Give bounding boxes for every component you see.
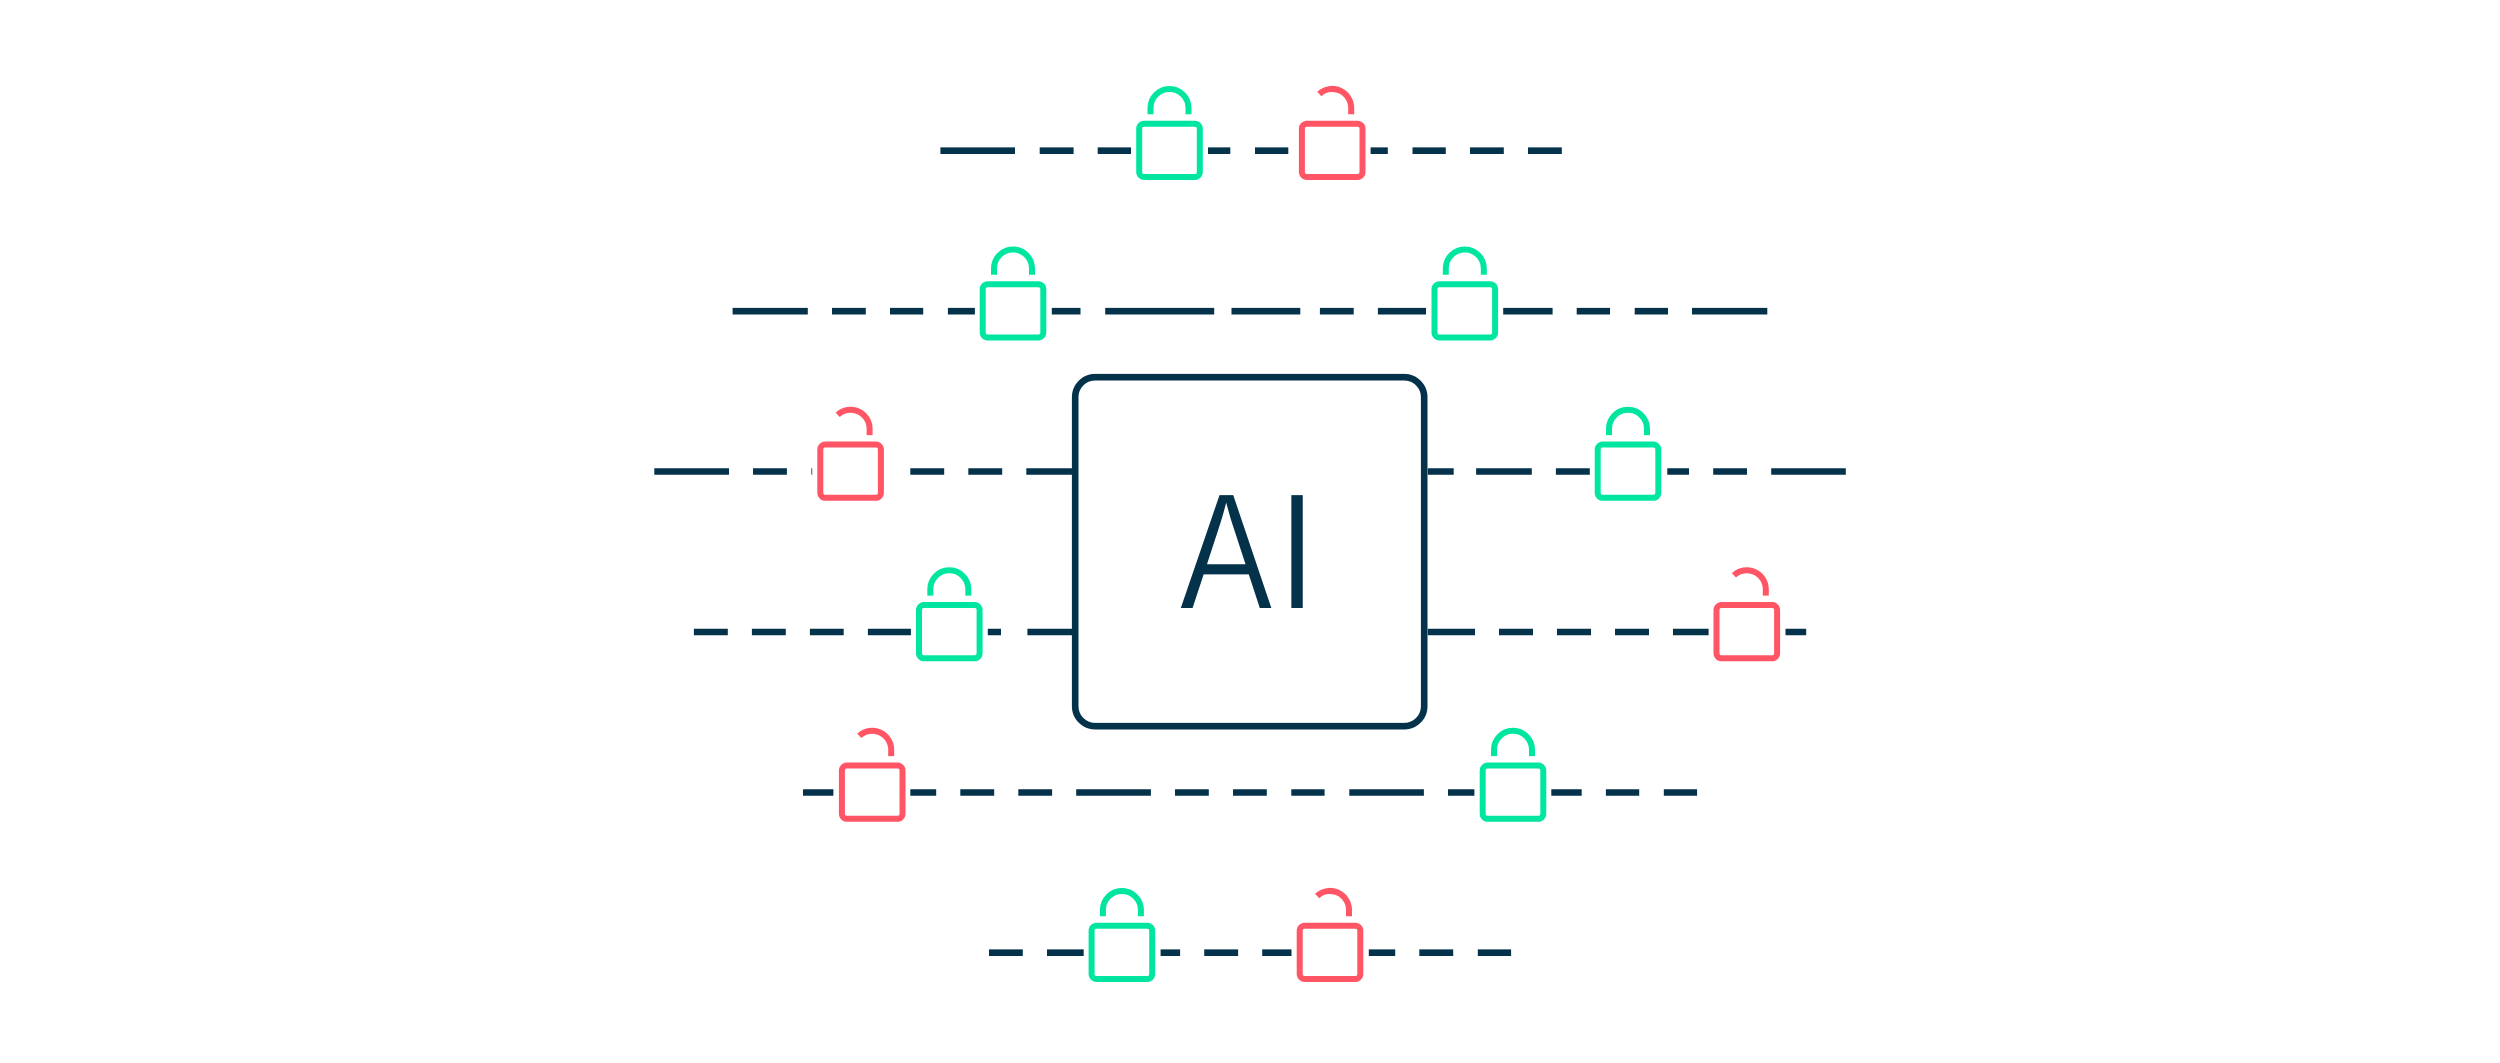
icon: open red lock, line 6: [1300, 891, 1360, 979]
icon: closed green lock, line 4: [919, 570, 980, 658]
icon: open red lock, line 1: [1302, 89, 1362, 177]
label: AI: [1179, 457, 1317, 645]
icon: closed green lock, line 2 left: [983, 250, 1043, 338]
dashed line 4: [694, 629, 1806, 635]
icon: closed green lock, line 6: [1092, 891, 1152, 979]
dashed line 5: [803, 789, 1697, 796]
dashed line 6: [989, 949, 1511, 956]
icon: open red lock, line 3: [820, 410, 881, 498]
icon: open red lock, line 4: [1716, 570, 1777, 658]
icon: closed green lock, line 1: [1139, 89, 1200, 177]
icon: closed green lock, line 3: [1598, 410, 1658, 498]
icon: closed green lock, line 2 right: [1434, 250, 1495, 338]
panel: AI box: [1075, 377, 1424, 726]
icon: closed green lock, line 5: [1483, 731, 1543, 819]
label: AI: A: [1179, 457, 1273, 645]
dashed line 2: [733, 308, 1767, 315]
label: AI: I: [1278, 457, 1317, 645]
dashed line 1: [940, 147, 1562, 154]
icon: open red lock, line 5: [842, 731, 902, 819]
dashed line 3: [654, 468, 1846, 475]
